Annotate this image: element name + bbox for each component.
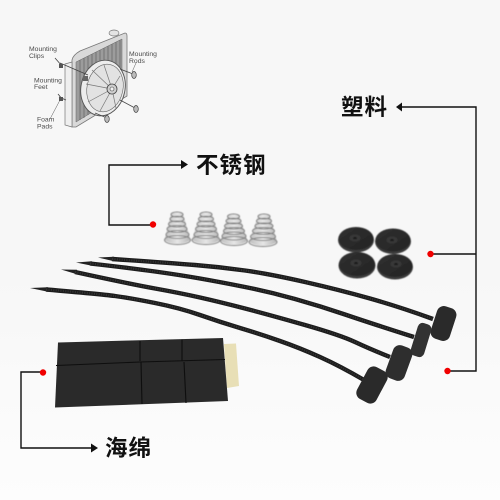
arrow: sponge callout (21, 369, 98, 452)
heading: sponge: 海绵 (105, 436, 152, 461)
foam pads (55, 338, 239, 408)
diagram label: Mounting Clips: Clips (29, 53, 45, 60)
washer 1 (338, 227, 374, 252)
diagram label: Mounting Rods: Rods (129, 58, 145, 65)
diagram label: Mounting Feet: Mounting (34, 78, 62, 84)
diagram label: Foam Pads: Foam (37, 116, 55, 124)
arrow: stainless steel callout (109, 160, 188, 228)
diagram label: Foam Pads: Pads (37, 124, 53, 130)
foam block (55, 338, 228, 408)
tie 4 (30, 287, 390, 406)
diagram label: Mounting Clips: Mounting (29, 46, 57, 53)
spring 1 (164, 212, 190, 244)
washer 4 (377, 254, 413, 280)
springs (164, 212, 277, 246)
tie 2 (76, 261, 433, 358)
heading: stainless steel: 不锈钢 (196, 153, 267, 178)
arrow: plastic callout (396, 102, 476, 374)
diagram label: Mounting Rods: Mounting (129, 51, 157, 58)
tie 3 (61, 270, 414, 383)
tie 1 (98, 257, 458, 343)
washer 3 (338, 252, 376, 278)
spring 2 (192, 212, 220, 244)
washer 2 (375, 228, 411, 254)
adhesive backing strip (224, 344, 239, 388)
cable ties (30, 257, 458, 406)
spring 4 (249, 214, 277, 246)
plastic washers (338, 227, 413, 280)
diagram: radiator and fan mounting (29, 30, 157, 130)
heading: plastic: 塑料 (341, 95, 388, 120)
spring 3 (220, 214, 248, 246)
diagram label: Mounting Feet: Feet (34, 84, 48, 91)
